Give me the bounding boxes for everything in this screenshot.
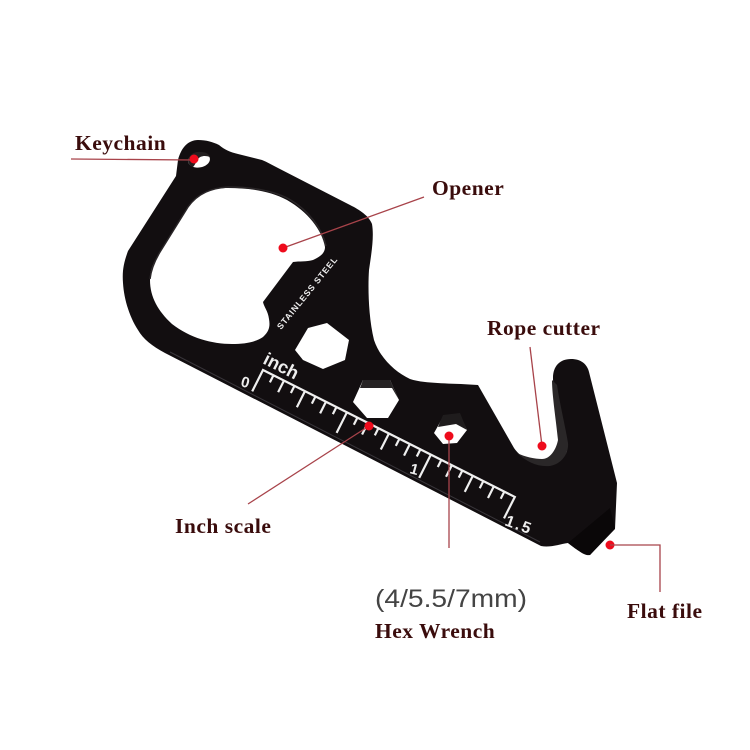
callout: hex wrench: (4/5.5/7mm) bbox=[375, 585, 527, 613]
ruler label: 1.5: 1.5 bbox=[503, 513, 535, 538]
small hex hole bbox=[434, 413, 467, 444]
ruler label: 0: 0 bbox=[239, 373, 251, 392]
medium hex hole bbox=[353, 380, 399, 418]
callout: opener: Opener bbox=[432, 176, 504, 200]
opener bevel bbox=[150, 187, 326, 279]
callout: inch scale bbox=[175, 422, 374, 538]
bottom edge bevel bbox=[170, 352, 540, 542]
large hex hole bbox=[295, 323, 349, 369]
callout: hex wrench bbox=[375, 432, 527, 643]
keychain hole bbox=[187, 151, 211, 169]
ruler label: inch: inch bbox=[260, 349, 302, 383]
callout: keychain bbox=[71, 131, 198, 164]
engraved text: stainless steel: STAINLESS STEEL bbox=[275, 255, 339, 331]
callout: rope cutter: Rope cutter bbox=[487, 316, 601, 340]
multi-tool body bbox=[123, 140, 617, 555]
inch ruler bbox=[251, 370, 515, 520]
flat file wedge bbox=[568, 508, 615, 555]
callout: inch scale: Inch scale bbox=[175, 514, 271, 538]
callout: opener bbox=[278, 176, 504, 252]
callout: keychain: Keychain bbox=[75, 131, 166, 155]
callout: flat file bbox=[606, 540, 703, 623]
callout: flat file: Flat file bbox=[627, 599, 703, 623]
steel outline with opener hole bbox=[123, 140, 617, 555]
hook bevel bbox=[517, 380, 568, 466]
callout: rope cutter bbox=[487, 316, 601, 450]
callout: hex wrench: Hex Wrench bbox=[375, 619, 495, 643]
ruler label: 1: 1 bbox=[408, 460, 420, 479]
